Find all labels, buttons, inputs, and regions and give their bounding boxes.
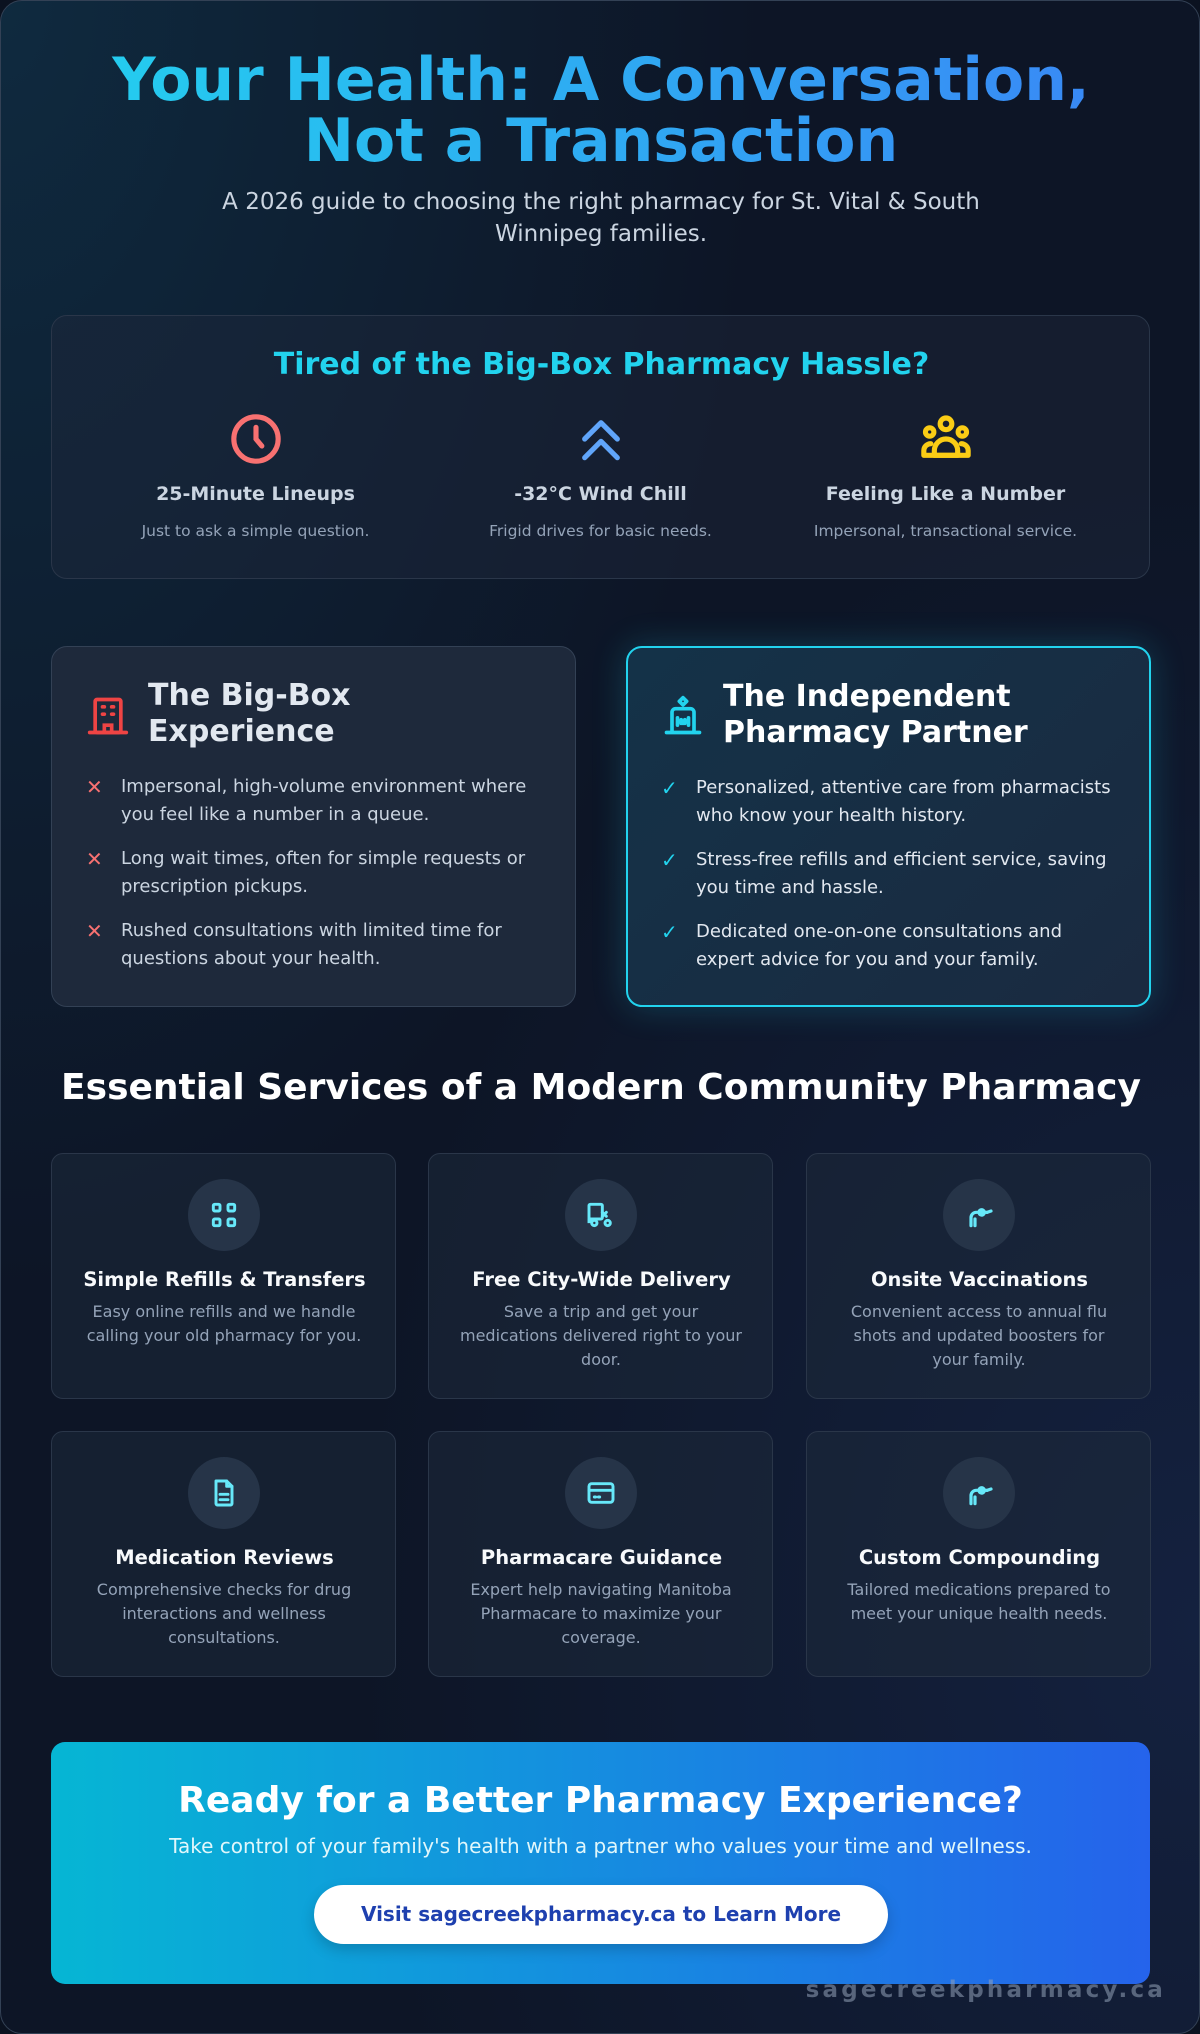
list: positives: ✓	[661, 776, 678, 800]
button	[314, 1885, 888, 1944]
panel: big-box experience	[51, 646, 576, 1007]
heading	[148, 678, 351, 749]
icon: group	[921, 415, 971, 458]
heading: The Big-Box	[148, 678, 351, 713]
icon: card	[565, 1457, 637, 1529]
call to action	[51, 1742, 1150, 1984]
panel: big-box hassle	[51, 315, 1150, 579]
icon: mortar	[943, 1457, 1015, 1529]
item: wind chill: Frigid drives for basic needs.	[489, 522, 712, 540]
service: refills	[51, 1153, 396, 1399]
service: compounding: Custom Compounding	[859, 1546, 1100, 1569]
icon: chevrons up	[582, 420, 620, 460]
service: vaccinations	[806, 1153, 1151, 1399]
heading: Pharmacy Partner	[723, 715, 1028, 750]
item: wind chill	[489, 420, 712, 540]
service: pharmacare: Expert help navigating Manitoba Pharmacare to maximize your coverage.	[470, 1580, 732, 1647]
service: vaccinations: Convenient access to annual flu shots and updated boosters for your family.	[851, 1302, 1107, 1369]
list: negatives: Rushed consultations with limited time for questions about your health.	[121, 920, 502, 969]
service: delivery: Save a trip and get your medications delivered right to your door.	[460, 1302, 742, 1369]
list: negatives: Long wait times, often for simple requests or prescription pickups.	[121, 848, 525, 897]
section heading: Essential Services of a Modern Community Pharmacy	[61, 1067, 1141, 1108]
service: vaccinations: Onsite Vaccinations	[871, 1268, 1088, 1291]
list: positives	[661, 776, 1111, 970]
item: number: Impersonal, transactional service.	[814, 522, 1077, 540]
list: positives: Personalized, attentive care from pharmacists who know your health history.	[696, 777, 1111, 826]
icon: document	[188, 1457, 260, 1529]
list: negatives: ✕	[86, 847, 103, 871]
list: negatives	[86, 775, 526, 969]
button: Visit sagecreekpharmacy.ca to Learn More	[361, 1902, 841, 1926]
item: number	[814, 415, 1077, 540]
heading: Experience	[148, 714, 335, 749]
panel heading: Tired of the Big-Box Pharmacy Hassle?	[274, 347, 929, 382]
list: negatives: ✕	[86, 775, 103, 799]
icon: truck	[565, 1179, 637, 1251]
subtitle: A 2026 guide to choosing the right pharmacy for St. Vital & South Winnipeg families.	[222, 189, 980, 247]
item: wind chill: -32°C Wind Chill	[514, 483, 687, 505]
item: lineups	[140, 414, 369, 540]
list: negatives: Impersonal, high-volume environment where you feel like a number in a queue.	[121, 776, 526, 825]
icon: building	[88, 698, 128, 734]
watermark: sagecreekpharmacy.ca	[806, 1977, 1166, 2003]
heading	[723, 679, 1028, 750]
service: refills: Simple Refills & Transfers	[83, 1268, 366, 1291]
title: Your Health: A Conversation,	[112, 45, 1090, 115]
service: compounding	[806, 1431, 1151, 1677]
icon: syringe	[943, 1179, 1015, 1251]
icon: pharmacy	[664, 696, 702, 734]
service: pharmacare	[428, 1431, 773, 1677]
item: lineups: Just to ask a simple question.	[142, 522, 369, 540]
service: reviews: Comprehensive checks for drug interactions and wellness consultations.	[97, 1580, 351, 1647]
list: negatives: ✕	[86, 919, 103, 943]
list: positives: Stress-free refills and efficient service, saving you time and hassle.	[696, 849, 1107, 898]
icon: clock	[231, 414, 281, 464]
heading: The Independent	[723, 679, 1011, 714]
service: delivery	[428, 1153, 773, 1399]
title	[1, 50, 1200, 172]
service: delivery: Free City-Wide Delivery	[472, 1268, 731, 1291]
service: reviews: Medication Reviews	[115, 1546, 334, 1569]
cta text: Take control of your family's health with a partner who values your time and wellness.	[169, 1834, 1032, 1858]
service: refills: Easy online refills and we handle calling your old pharmacy for you.	[87, 1302, 361, 1345]
list: positives: Dedicated one-on-one consultations and expert advice for you and your family.	[696, 921, 1062, 970]
title: Not a Transaction	[304, 106, 898, 176]
panel: independent pharmacy	[626, 646, 1151, 1007]
service: reviews	[51, 1431, 396, 1677]
cta heading: Ready for a Better Pharmacy Experience?	[178, 1780, 1023, 1821]
list: positives: ✓	[661, 848, 678, 872]
service: pharmacare: Pharmacare Guidance	[481, 1546, 722, 1569]
list: positives: ✓	[661, 920, 678, 944]
icon: grid	[188, 1179, 260, 1251]
item: number: Feeling Like a Number	[826, 483, 1065, 505]
item: lineups: 25-Minute Lineups	[156, 483, 355, 505]
service: compounding: Tailored medications prepared to meet your unique health needs.	[847, 1580, 1111, 1623]
